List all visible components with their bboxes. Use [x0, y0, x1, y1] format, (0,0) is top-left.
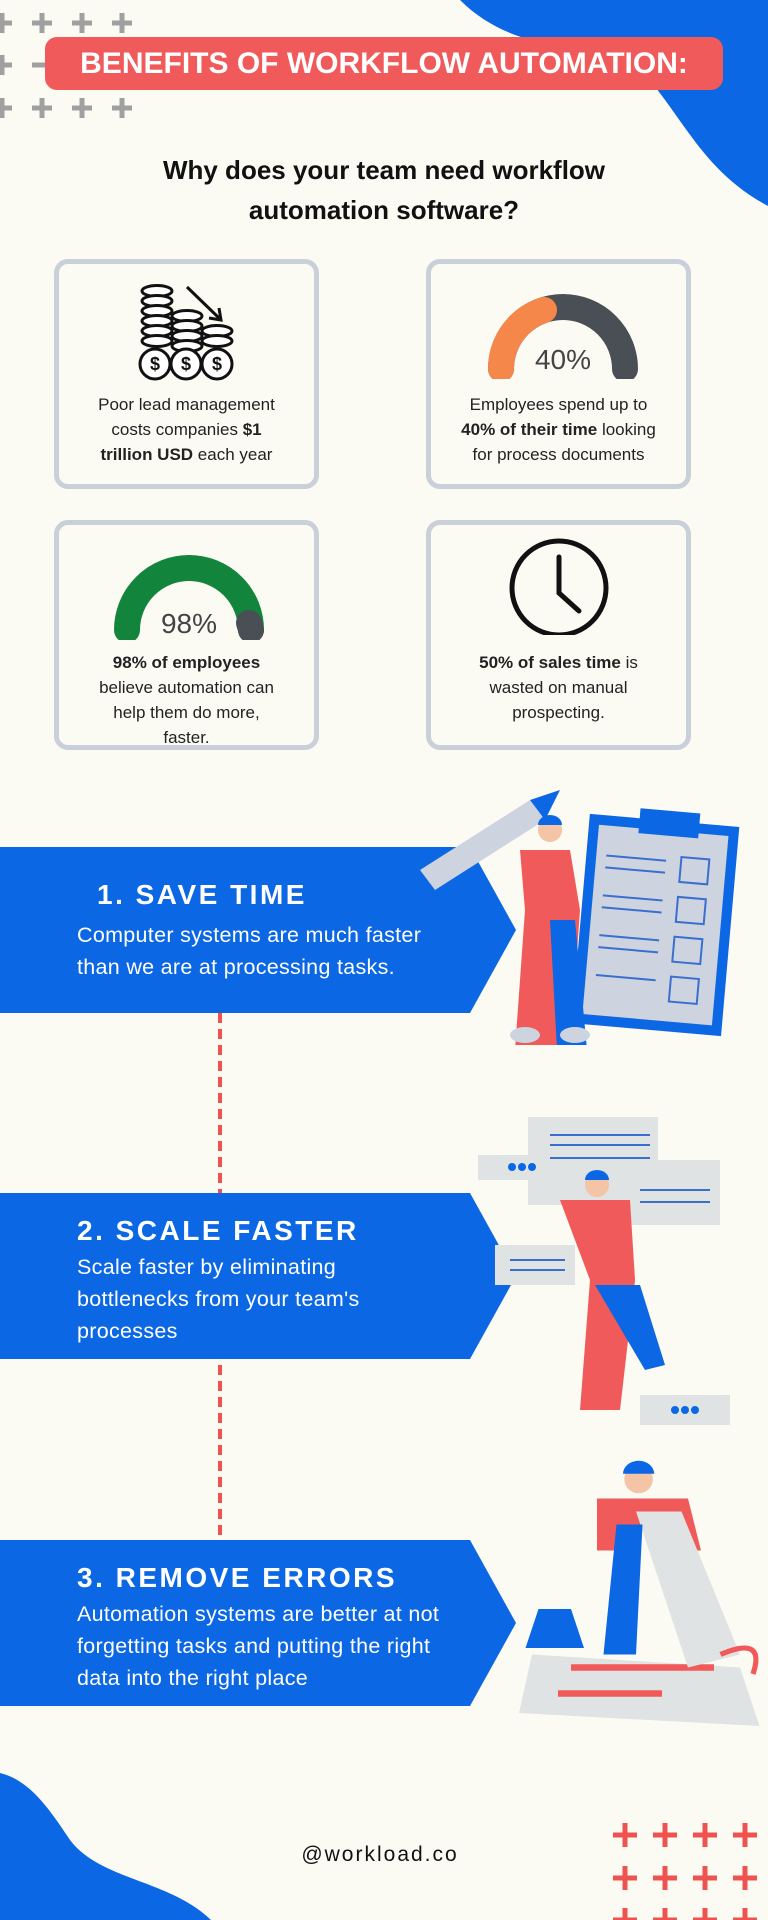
- gauge 98%: 98%: [161, 608, 217, 639]
- icon: coins: $: [212, 354, 222, 374]
- banner 1: than we are at processing tasks.: [77, 955, 395, 979]
- text: trillion USD each year: [101, 445, 272, 464]
- icon: clock: [510, 538, 608, 635]
- banner 1: Computer systems are much faster: [77, 923, 421, 947]
- banner 3: Automation systems are better at not: [77, 1602, 439, 1626]
- text: Employees spend up to: [470, 395, 647, 414]
- gauge 40%: 40%: [535, 344, 591, 375]
- subtitle: Why does your team need workflow: [163, 155, 605, 185]
- text: [461, 395, 656, 464]
- illustration 2: [478, 1117, 730, 1425]
- text: help them do more,: [113, 703, 260, 722]
- text: believe automation can: [99, 678, 274, 697]
- gauge 98%: [114, 555, 264, 640]
- banner 1: 1. SAVE TIME: [97, 879, 307, 910]
- title: BENEFITS OF WORKFLOW AUTOMATION:: [80, 47, 688, 80]
- icon: coins: [138, 284, 234, 380]
- text: for process documents: [473, 445, 644, 464]
- banner 2: 2. SCALE FASTER: [77, 1215, 359, 1246]
- banner 3: data into the right place: [77, 1666, 308, 1690]
- text: Poor lead management: [98, 395, 275, 414]
- banner 3: 3. REMOVE ERRORS: [77, 1562, 397, 1593]
- dashed connector: [218, 1013, 222, 1535]
- banner 2: Scale faster by eliminating: [77, 1255, 336, 1279]
- banner 3: [0, 1540, 516, 1706]
- icon: coins: $: [181, 354, 191, 374]
- text: wasted on manual: [490, 678, 627, 697]
- text: [98, 395, 275, 464]
- text: faster.: [163, 728, 210, 747]
- text: costs companies $1: [111, 420, 262, 439]
- illustration 3: [519, 1460, 760, 1726]
- banner 2: bottlenecks from your team's: [77, 1287, 360, 1311]
- card: 98%: [54, 520, 319, 750]
- subtitle: automation software?: [249, 195, 519, 225]
- subtitle: [163, 155, 605, 225]
- title: [45, 37, 723, 90]
- text: [479, 653, 638, 722]
- card: 40%: [426, 259, 691, 489]
- text: 50% of sales time is: [479, 653, 638, 672]
- text: [99, 653, 274, 747]
- card: lead management: [54, 259, 319, 489]
- text: prospecting.: [512, 703, 605, 722]
- footer handle: @workload.co: [301, 1843, 459, 1866]
- banner 2: [0, 1193, 516, 1359]
- icon: coins: $: [150, 354, 160, 374]
- banner 1: [0, 847, 516, 1013]
- card: 50%: [426, 520, 691, 750]
- gauge 40%: [488, 294, 638, 379]
- text: 98% of employees: [113, 653, 260, 672]
- banner 3: forgetting tasks and putting the right: [77, 1634, 430, 1658]
- banner 2: processes: [77, 1319, 178, 1343]
- illustration 1: [420, 790, 740, 1045]
- text: 40% of their time looking: [461, 420, 656, 439]
